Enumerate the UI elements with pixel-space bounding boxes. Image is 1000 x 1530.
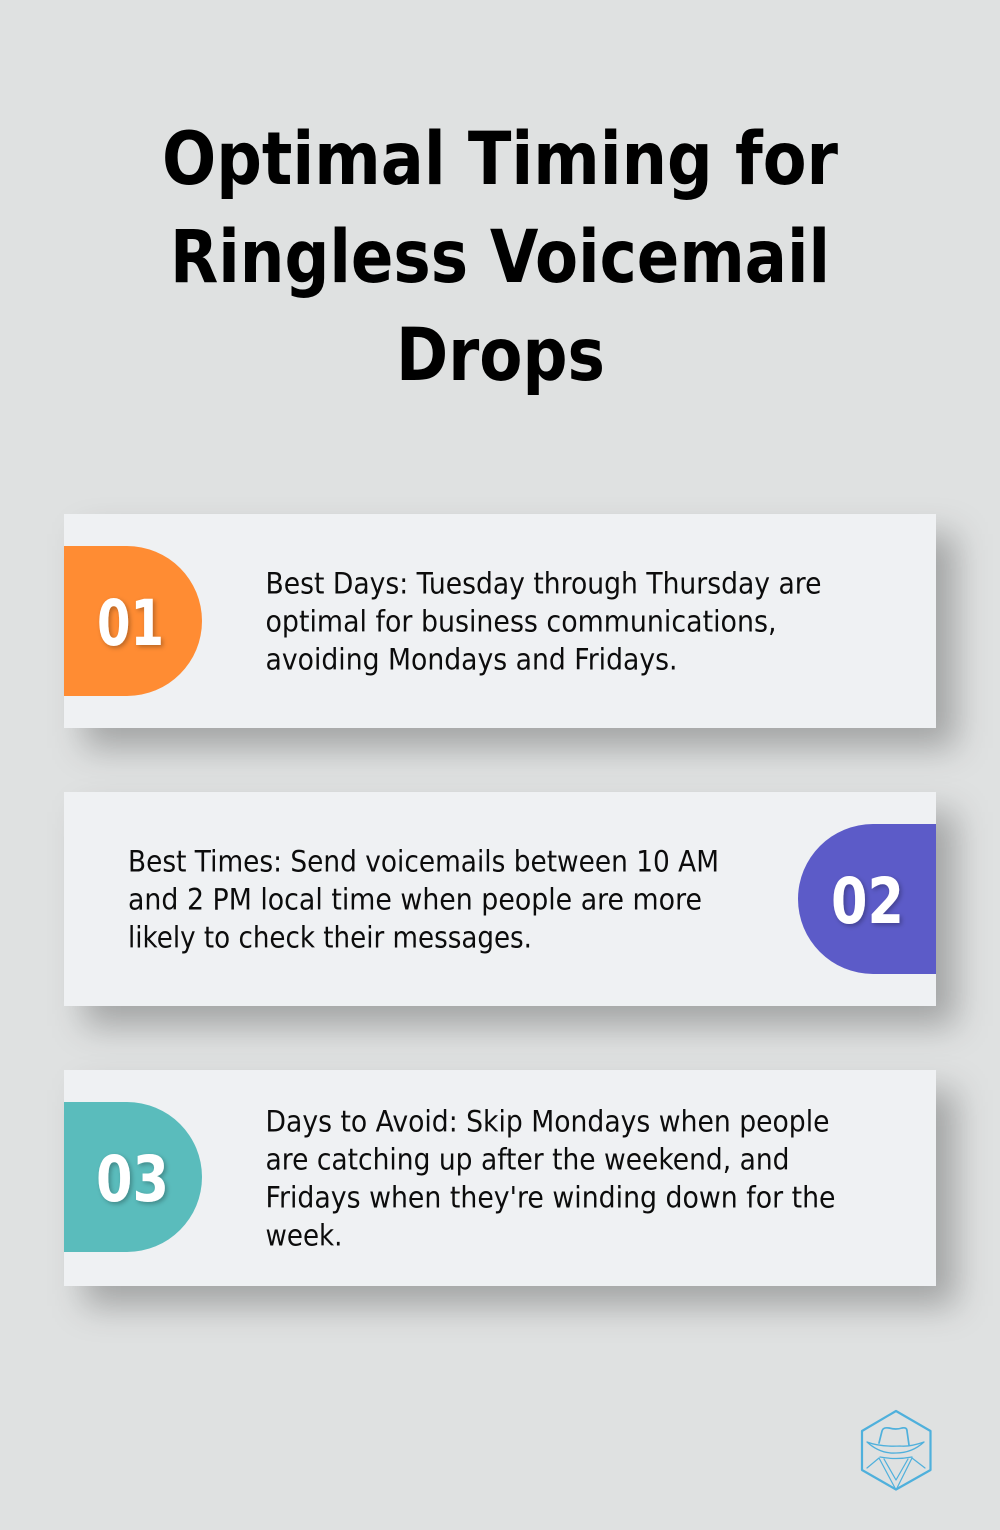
panel: step 01 best days [64,514,956,748]
text: days to avoid: are catching up after the weekend, and [266,1142,790,1176]
badge: 01 [64,546,202,696]
icon: hexagon spy logo [862,1411,930,1490]
text: best times [128,844,719,954]
text: best times: and 2 PM local time when people are more [128,882,702,916]
text: days to avoid: week. [266,1218,342,1252]
text: best times: likely to check their messages. [128,920,532,954]
panel: step 02 best times [64,792,956,1026]
badge: 03: 03 [96,1143,169,1216]
text: best days: Best Days: Tuesday through Thursday are [266,566,822,600]
text: best days: optimal for business communications, [266,604,776,638]
text: days to avoid: Days to Avoid: Skip Mondays when people [266,1104,830,1138]
panel: step 03 days to avoid [64,1070,956,1306]
text: best days [266,566,822,676]
title: Ringless Voicemail [170,215,830,300]
title: Drops [396,313,605,398]
title: Optimal Timing for [162,117,838,202]
text: best days: avoiding Mondays and Fridays. [266,642,678,676]
badge: 02 [798,824,936,974]
title [162,117,838,398]
text: days to avoid: Fridays when they're winding down for the [266,1180,836,1214]
badge: 03 [64,1102,202,1252]
text: days to avoid [266,1104,836,1252]
badge: 01: 01 [97,587,164,660]
badge: 02: 02 [831,865,904,938]
text: best times: Best Times: Send voicemails between 10 AM [128,844,719,878]
